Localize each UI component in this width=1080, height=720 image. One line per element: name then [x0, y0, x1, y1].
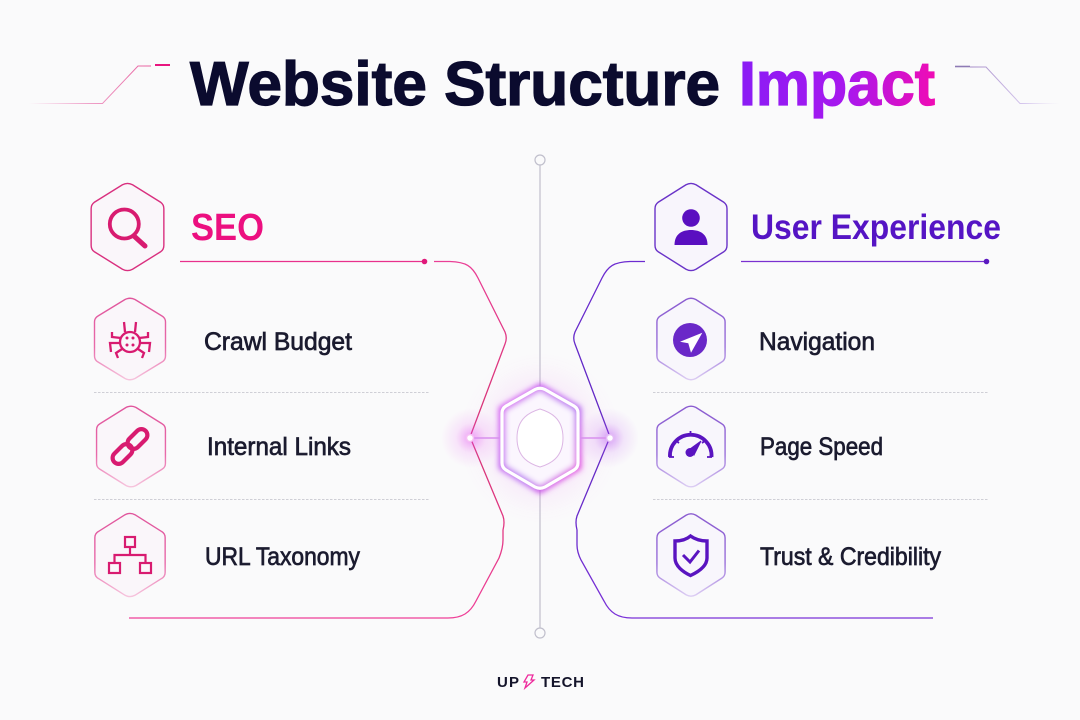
connector: SEO [129, 262, 506, 618]
SEO heading rule [180, 259, 427, 264]
label: Navigation [759, 328, 875, 356]
hub inner shape [517, 409, 563, 467]
dividers [94, 392, 989, 500]
label: URL Taxonomy [205, 543, 360, 571]
hub spokes [471, 437, 609, 439]
icon: bug [94, 298, 166, 380]
icon: user hexagon [655, 183, 727, 271]
item: page speed [657, 406, 883, 487]
central vertical axis [535, 155, 545, 638]
logo: UP TECH: UP [497, 674, 519, 691]
icon: search hexagon [91, 183, 164, 271]
connector: user experience [574, 262, 933, 618]
title accent right [955, 66, 1060, 104]
item: internal links [97, 406, 351, 487]
icon: compass arrow [657, 298, 725, 380]
item: URL taxonomy [95, 513, 360, 597]
hub hexagon [502, 388, 578, 488]
label: Trust & Credibility [760, 543, 941, 571]
label: Crawl Budget [204, 328, 352, 356]
icon: sitemap [95, 513, 165, 597]
item: trust and credibility [657, 514, 941, 596]
item: navigation [657, 298, 875, 380]
hub glow [441, 373, 639, 503]
heading: user experience: User Experience [751, 208, 1001, 247]
central hub [441, 373, 639, 503]
icon: chain link [97, 406, 165, 487]
panel: user experience [655, 183, 1001, 596]
title: Impact [739, 50, 935, 119]
label: Internal Links [207, 433, 351, 461]
icon: lightning bolt [524, 675, 534, 688]
title accent left [29, 65, 170, 104]
icon: shield check [657, 514, 725, 596]
logo: UP TECH: TECH [541, 674, 584, 691]
hub node left [466, 434, 474, 442]
label: Page Speed [760, 433, 883, 461]
logo: UP TECH [497, 674, 584, 691]
panel: SEO [91, 183, 427, 597]
hub node right [606, 434, 614, 442]
user experience heading rule [741, 259, 989, 264]
heading: SEO: SEO [191, 207, 264, 249]
item: crawl budget [94, 298, 352, 380]
icon: gauge [657, 406, 725, 487]
title: Website Structure [190, 50, 720, 119]
